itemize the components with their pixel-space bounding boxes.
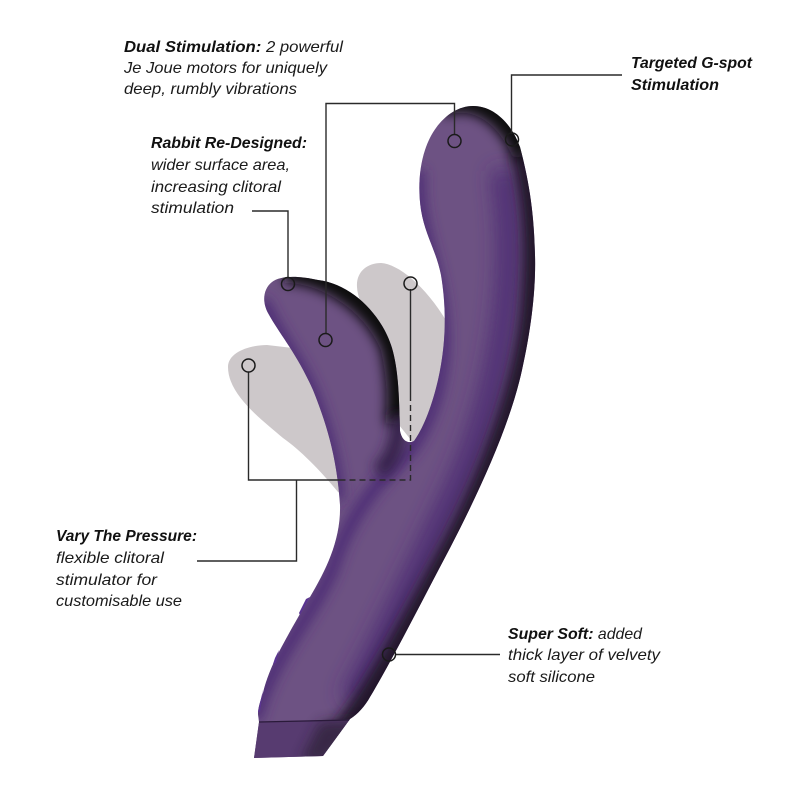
text: vary the pressure: customisable use <box>56 593 182 610</box>
text: super soft <box>508 626 661 686</box>
shading: dark head cap <box>440 100 526 155</box>
text: rabbit re-designed: Rabbit Re-Designed: <box>151 135 307 152</box>
grey ghost: stimulator forward position <box>228 345 350 500</box>
shading: left edge purple bands <box>255 170 443 720</box>
text: dual stimulation: Je Joue motors for uniquely <box>123 60 328 77</box>
text: targeted g-spot <box>631 55 753 94</box>
marker: ghost rear <box>404 277 417 290</box>
text: dual stimulation: deep, rumbly vibrations <box>124 81 297 98</box>
text: vary the pressure: flexible clitoral <box>56 550 164 567</box>
marker: dual motor lower <box>319 334 332 346</box>
text: rabbit re-designed <box>151 135 307 217</box>
shading: dark right edge of shaft <box>335 150 538 750</box>
marker: ghost forward <box>242 359 255 372</box>
marker: rabbit tip <box>282 278 294 290</box>
text: rabbit re-designed: stimulation <box>151 200 234 217</box>
shading: dark top edge of stimulator <box>285 268 402 425</box>
text: targeted g-spot: Targeted G-spot <box>631 55 753 72</box>
text: vary the pressure: stimulator for <box>56 572 158 589</box>
side buttons <box>258 597 310 712</box>
callout lines <box>197 75 622 654</box>
text: super soft: thick layer of velvety <box>508 647 661 664</box>
text: rabbit re-designed: increasing clitoral <box>151 179 281 196</box>
text: vary the pressure: Vary The Pressure: <box>56 528 197 545</box>
marker: dual motor upper <box>448 134 461 148</box>
text: targeted g-spot: Stimulation <box>631 77 719 94</box>
text: super soft: Super Soft: added <box>508 626 643 643</box>
shading: base collar <box>254 719 350 758</box>
text: dual stimulation <box>123 39 343 98</box>
shading: purple band beside dark edge <box>350 170 508 700</box>
marker: soft silicone <box>382 648 396 661</box>
text: dual stimulation: Dual Stimulation: 2 powerful <box>124 39 343 56</box>
text: rabbit re-designed: wider surface area, <box>151 157 290 174</box>
grey ghost: stimulator rear position <box>357 263 450 445</box>
marker: g-spot <box>506 133 518 146</box>
text: super soft: soft silicone <box>508 669 595 686</box>
product body <box>254 106 536 758</box>
text: vary the pressure <box>56 528 197 610</box>
